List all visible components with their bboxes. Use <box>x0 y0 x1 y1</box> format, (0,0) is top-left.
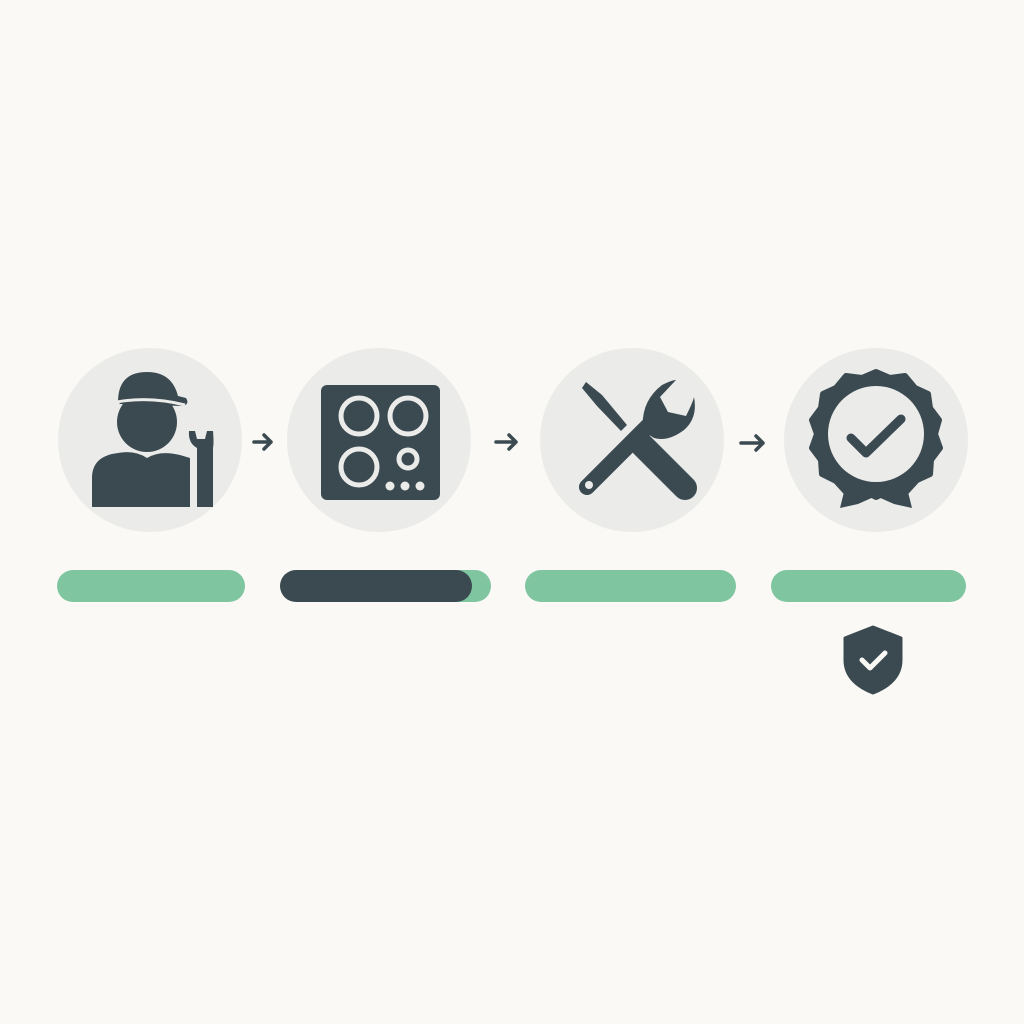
arrow 2 <box>496 435 516 449</box>
arrow 1 <box>254 435 271 449</box>
step 1: technician icon <box>58 348 242 532</box>
arrow 3 <box>741 436 763 450</box>
progress bar 2 <box>280 570 491 602</box>
icon: shield check <box>845 627 901 693</box>
progress bar 4 <box>771 570 966 602</box>
step 4: certified badge icon <box>784 348 968 532</box>
step 3: tools icon <box>540 348 724 532</box>
step 2: cooktop icon <box>287 348 471 532</box>
progress bar 3 <box>525 570 736 602</box>
progress bar 1 <box>57 570 245 602</box>
